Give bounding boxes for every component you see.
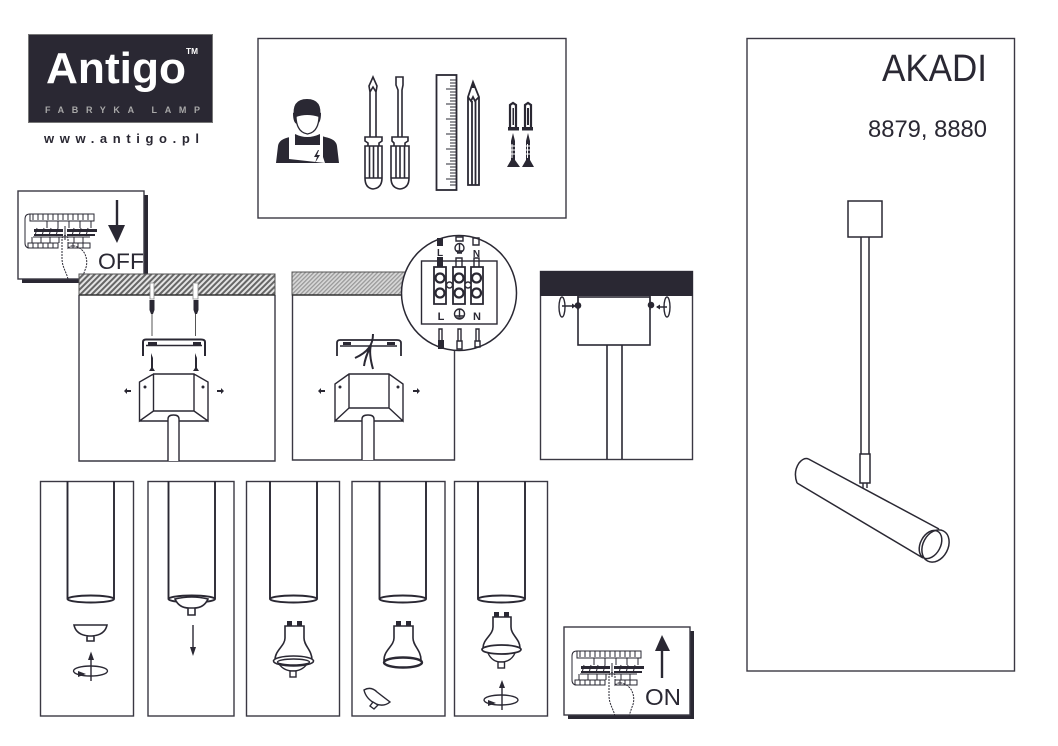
- off label: OFF: [98, 249, 144, 274]
- panel: switch off: [18, 191, 148, 283]
- terminal block: [434, 267, 483, 304]
- website: www.antigo.pl: [43, 131, 199, 146]
- icon: bulb with cover: [482, 612, 521, 668]
- terminal labels: N: [473, 311, 481, 323]
- icon: pencil: [468, 82, 479, 185]
- logo: FABRYKA LAMP: [45, 105, 200, 115]
- top wires: [437, 237, 480, 268]
- arrow down: [190, 625, 196, 656]
- icon: bulb with cover: [274, 621, 314, 677]
- icon: breaker box off: [25, 214, 97, 279]
- model numbers: 8879, 8880: [868, 116, 987, 143]
- icon: junction box: [140, 374, 208, 461]
- logo: TM: [186, 47, 198, 56]
- icon: lamp tube: [270, 481, 317, 602]
- icon: arrows outward: [318, 388, 420, 394]
- icon: left screw: [559, 296, 581, 317]
- icon: lamp tube: [380, 481, 426, 603]
- icon: plugs: [150, 283, 198, 336]
- icon: junction box: [335, 374, 403, 460]
- icon: lamp tube: [478, 481, 525, 603]
- on label: ON: [645, 684, 681, 710]
- panel: product: [747, 38, 1014, 671]
- panel: step 2: [148, 481, 234, 716]
- icon: cover: [175, 597, 208, 615]
- panel: tools: [258, 38, 566, 218]
- icon: bracket: [143, 340, 205, 356]
- icon: lamp tube: [168, 481, 215, 603]
- arrow down: [108, 200, 125, 243]
- terminal labels: L: [438, 311, 445, 323]
- icon: arrows outward: [124, 388, 224, 394]
- title: AKADI: [882, 48, 987, 90]
- icon: ruler: [436, 75, 456, 190]
- panel: step 1 remove cover: [40, 481, 134, 716]
- panel: step 5: [454, 481, 548, 716]
- top wires: L: [437, 248, 443, 259]
- icon: cover: [74, 625, 107, 641]
- panel: wiring: [292, 272, 454, 460]
- panel: switch on: [564, 627, 694, 719]
- wiring detail circle: [402, 236, 516, 350]
- bottom wires: [438, 329, 480, 349]
- icon: lamp tube: [68, 481, 114, 603]
- logo: [28, 34, 212, 122]
- panel: fixing canopy: [540, 271, 693, 460]
- icon: right screw: [648, 296, 670, 317]
- icon: bulb: [384, 621, 422, 668]
- icon: flat screwdriver: [391, 77, 409, 189]
- arrow up with rotation: [74, 652, 108, 681]
- icon: tilted cover: [364, 688, 390, 709]
- icon: wall plugs and screws: [507, 103, 534, 167]
- icon: breaker box on: [572, 651, 644, 716]
- panel: mounting bracket: [79, 274, 275, 461]
- terminal labels: [438, 309, 481, 323]
- icon: electrician: [276, 99, 339, 163]
- panel: step 3: [246, 481, 340, 716]
- panel: step 4: [352, 481, 445, 716]
- icon: screws: [149, 353, 199, 371]
- illustration: lamp: [795, 201, 955, 567]
- icon: phillips screwdriver: [365, 77, 382, 189]
- arrow up with rotation: [484, 680, 518, 710]
- icon: bracket with wires: [337, 334, 401, 369]
- logo: Antigo: [46, 44, 186, 93]
- arrow up: [655, 635, 670, 678]
- top wires: N: [473, 249, 480, 260]
